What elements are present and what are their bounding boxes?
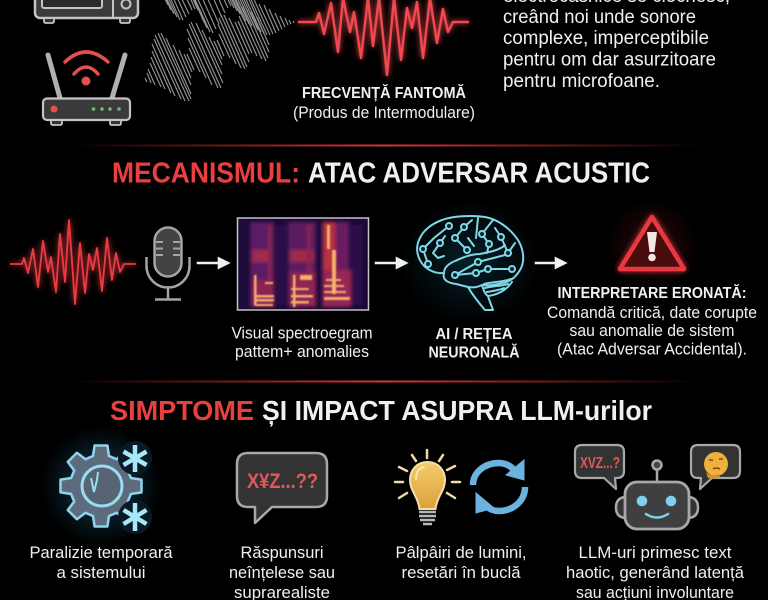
- arrow: [375, 257, 408, 269]
- icon: robot with bubbles: [575, 445, 740, 529]
- label: light flicker: [396, 543, 526, 582]
- icon: microphone: [146, 228, 190, 300]
- icon: garbled speech bubble: X¥Z...??: [247, 470, 318, 493]
- icon: frozen gear: [41, 426, 161, 546]
- text block: misinterpretation: sau anomalie de sistem: [570, 322, 734, 340]
- heading: symptoms: SIMPTOME: [110, 395, 254, 426]
- text block: misinterpretation: [547, 285, 757, 358]
- text block: misinterpretation: (Atac Adversar Accidental).: [557, 340, 747, 358]
- label: LLM chaotic text: [566, 543, 745, 600]
- caption: spectrogram: Visual spectroegram: [232, 324, 372, 342]
- chart: spectrogram: [238, 218, 368, 310]
- heading: mechanism: ATAC ADVERSAR ACUSTIC: [308, 158, 650, 190]
- arrow: [535, 257, 567, 269]
- label: nonsense answers: Răspunsuri: [240, 543, 324, 562]
- text block: misinterpretation: Comandă critică, date corupte: [547, 304, 757, 322]
- text block: misinterpretation: INTERPRETARE ERONATĂ:: [558, 285, 746, 302]
- label: light flicker: Pâlpâiri de lumini,: [396, 543, 526, 562]
- label: LLM chaotic text: haotic, generând latență: [566, 563, 745, 582]
- icon: flickering bulb: [395, 450, 460, 524]
- label: nonsense answers: [229, 543, 335, 600]
- label: light flicker: resetări în buclă: [402, 563, 521, 582]
- icon: microwave: [35, 0, 138, 23]
- icon: warning triangle: [606, 199, 698, 291]
- text block: explanation: [503, 0, 730, 92]
- heading: mechanism: MECANISMUL:: [112, 158, 300, 190]
- text block: explanation: creând noi unde sonore: [503, 7, 696, 28]
- chart: input red waveform: [10, 220, 136, 304]
- label: neural network: AI / REȚEA: [436, 326, 512, 343]
- chart: grey interfering sound waves: [145, 0, 294, 101]
- heading: mechanism: [112, 158, 650, 190]
- heading: symptoms: ȘI IMPACT ASUPRA LLM-urilor: [262, 395, 652, 426]
- caption: spectrogram: pattem+ anomalies: [235, 343, 369, 361]
- text block: explanation: complexe, imperceptibile: [503, 28, 709, 49]
- label: system paralysis: Paralizie temporară: [30, 543, 173, 562]
- arrow: [197, 257, 230, 269]
- icon: garbled speech bubble: [237, 453, 327, 523]
- icon: neural network brain: [400, 200, 540, 324]
- icon: wifi router: [43, 52, 130, 125]
- label: phantom frequency: (Produs de Intermodulare): [293, 104, 475, 122]
- caption: spectrogram: [232, 324, 372, 361]
- label: system paralysis: [30, 543, 173, 582]
- label: phantom frequency: FRECVENȚĂ FANTOMĂ: [302, 85, 466, 102]
- label: phantom frequency: [293, 85, 475, 122]
- label: system paralysis: a sistemului: [56, 563, 146, 582]
- chart: phantom frequency red wave: [298, 0, 469, 75]
- icon: reset loop arrows: [473, 460, 525, 513]
- label: LLM chaotic text: LLM-uri primesc text: [578, 543, 732, 562]
- text block: explanation: pentru microfoane.: [503, 71, 660, 92]
- text block: explanation: pentru om dar asurzitoare: [503, 50, 716, 70]
- label: neural network: [428, 326, 520, 362]
- icon: robot with bubbles: XVZ...?: [580, 455, 620, 472]
- heading: symptoms: [110, 395, 652, 426]
- label: nonsense answers: neînțelese sau: [229, 563, 335, 582]
- label: neural network: NEURONALĂ: [428, 344, 520, 362]
